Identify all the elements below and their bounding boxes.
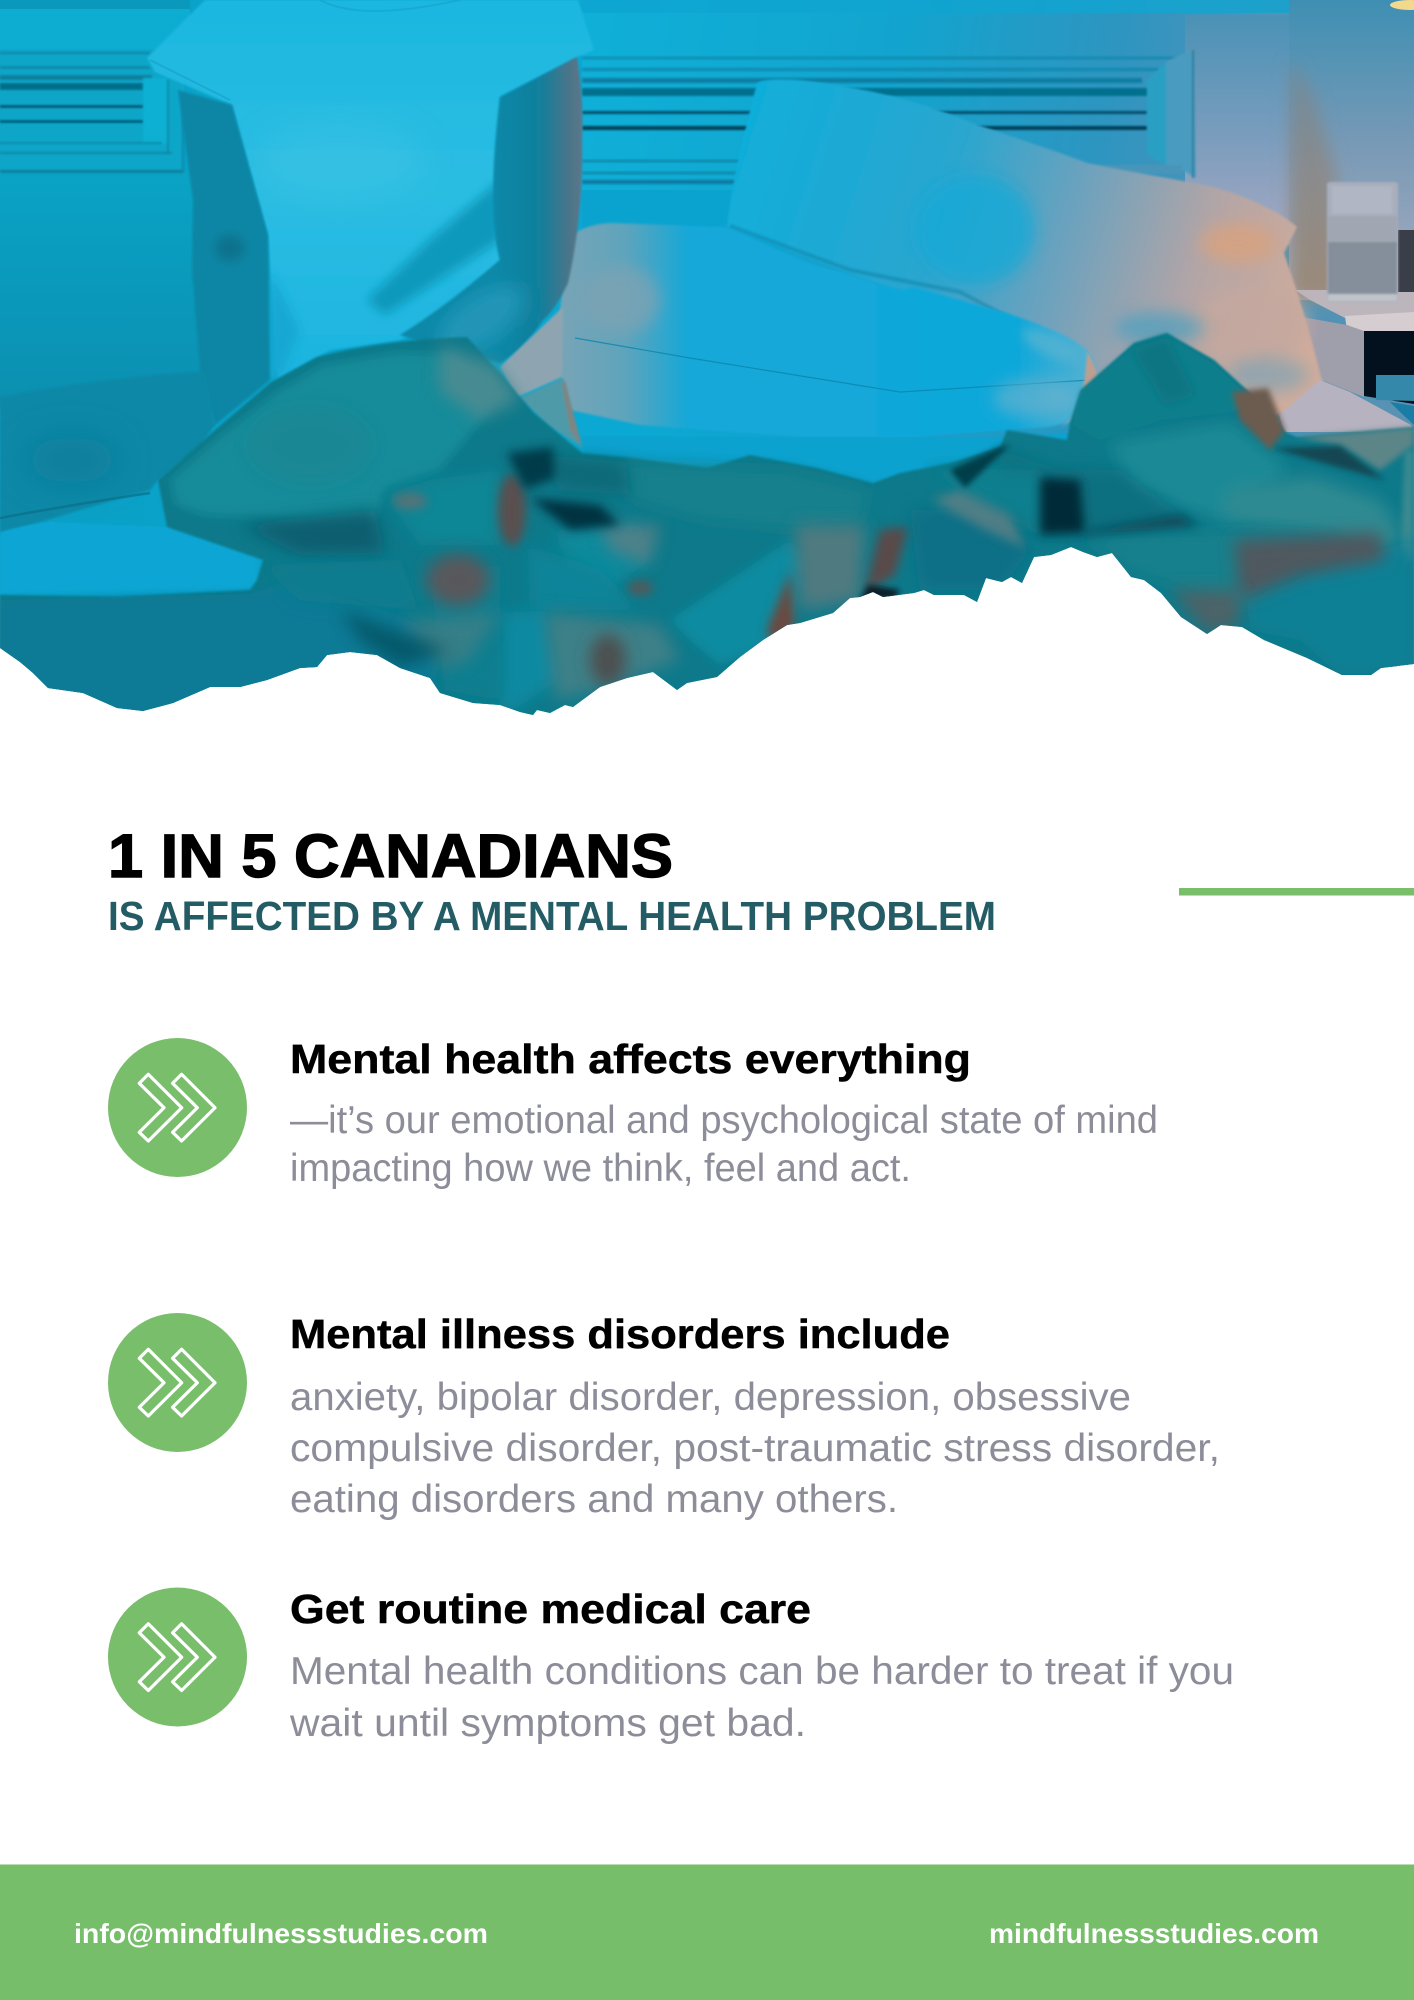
photo: person sitting on bed in blue light, torn lower edge [0, 0, 1414, 740]
blanket lump light [170, 352, 490, 520]
lower left blanket [0, 588, 437, 711]
pillow lamp tint [1200, 223, 1276, 263]
headboard panel [874, 0, 1289, 245]
mattress: bright left [0, 522, 263, 597]
person: lower shirt and shorts [500, 307, 582, 447]
wall: left side [0, 0, 210, 410]
subtitle: IS AFFECTED BY A MENTAL HEALTH PROBLEM [108, 893, 996, 939]
nightstand [1295, 290, 1414, 425]
headboard vent: left [0, 50, 184, 174]
wall: right side with lamp glow [1289, 0, 1414, 300]
bed sheet: right [1279, 380, 1414, 432]
person: shirt [147, 0, 594, 378]
icon: green circle with double chevron [108, 1038, 247, 1177]
person: right arm [400, 57, 582, 368]
item: mental health affects everything [108, 1036, 1158, 1190]
icon: green circle with double chevron [108, 1313, 247, 1452]
dark creases [340, 445, 1385, 668]
body text [290, 1376, 1220, 1521]
accent line [1179, 888, 1414, 896]
folds: right heap [1070, 340, 1245, 422]
body text: compulsive disorder, post-traumatic stress disorder, [290, 1427, 1220, 1470]
item: get routine medical care [108, 1586, 1234, 1745]
front pillow [557, 223, 1098, 437]
photo backdrop [0, 0, 1414, 740]
back pillow [727, 79, 1334, 420]
footer website: mindfulnessstudies.com [989, 1918, 1319, 1949]
body text: —it’s our emotional and psychological state of mind [290, 1099, 1158, 1142]
body text [289, 1650, 1234, 1745]
heading: Mental health affects everything [290, 1036, 971, 1082]
person: left arm [178, 90, 270, 425]
item: mental illness disorders include [108, 1311, 1220, 1521]
body text [290, 1099, 1158, 1190]
shirt shading [367, 180, 500, 315]
left cushion [0, 372, 215, 535]
body text: Mental health conditions can be harder to treat if you [290, 1650, 1234, 1693]
folds: centre [620, 462, 870, 530]
blanket [0, 333, 1414, 740]
heading: Get routine medical care [290, 1586, 811, 1632]
blanket base [0, 333, 1414, 740]
title: 1 IN 5 CANADIANS [108, 822, 673, 890]
body text: anxiety, bipolar disorder, depression, obsessive [290, 1376, 1131, 1419]
footer band [0, 1864, 1414, 2000]
body text: eating disorders and many others. [290, 1478, 898, 1521]
bed sheet: centre [796, 434, 1068, 482]
water glass [1327, 182, 1398, 302]
body text: impacting how we think, feel and act. [290, 1147, 911, 1190]
body text: wait until symptoms get bad. [289, 1702, 806, 1745]
footer email: info@mindfulnessstudies.com [74, 1918, 488, 1949]
heading: Mental illness disorders include [290, 1311, 950, 1357]
device behind glass [1398, 230, 1414, 292]
headboard vent: right [582, 50, 1196, 184]
brown patches [393, 388, 1385, 686]
icon: green circle with double chevron [108, 1588, 247, 1726]
